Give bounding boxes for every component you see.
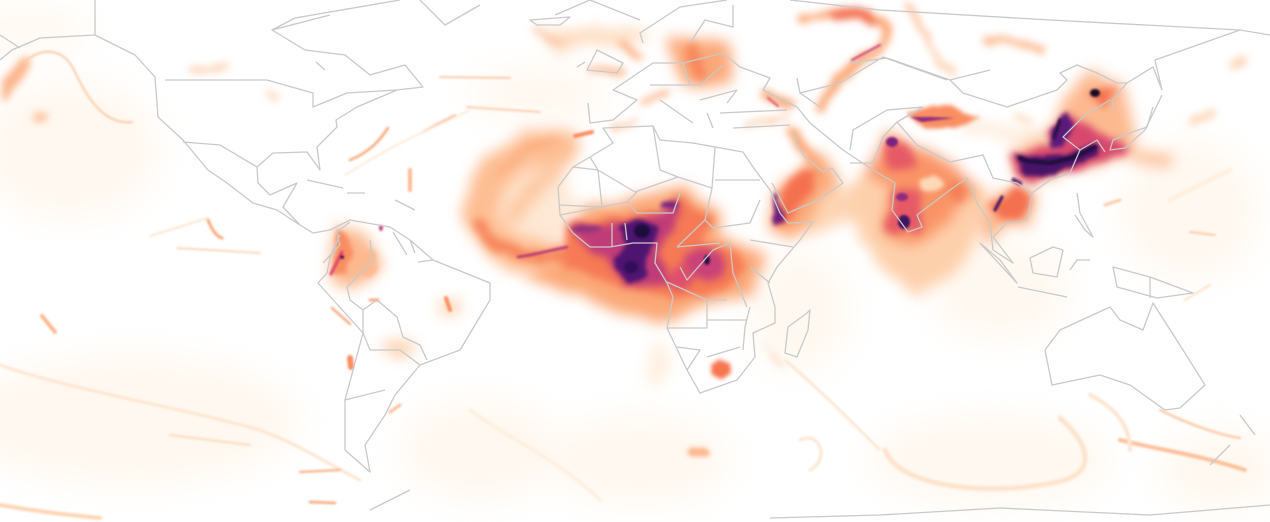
Europe outline [530, 0, 810, 128]
plume: west Africa and Atlantic swirl [477, 140, 760, 322]
Arctic islands [0, 0, 640, 70]
plume: east Africa and Arabia [768, 150, 880, 238]
New Zealand [1210, 415, 1255, 465]
plume: central Asia streak [905, 104, 980, 128]
plume: southern Africa [643, 333, 880, 457]
Southeast Asia islands [980, 193, 1193, 298]
plume: north Pacific and Atlantic streaks [0, 52, 1240, 300]
plume: South America [42, 218, 457, 412]
Antarctica fragments [370, 490, 1270, 518]
Madagascar [785, 310, 810, 357]
Eurasia outline [790, 0, 1270, 263]
plume: east Asia band [950, 65, 1168, 180]
Australia [1045, 303, 1205, 410]
plume: India [845, 132, 990, 295]
Cuba and Caribbean [307, 180, 415, 210]
plume: southern ocean swirls [0, 365, 1245, 518]
Africa outline [558, 126, 813, 393]
Arabia [772, 123, 843, 213]
plume: Europe and Russia streaks [530, 3, 1040, 158]
North America outline [0, 0, 423, 233]
South America outline [318, 220, 490, 472]
Japan [1110, 95, 1162, 150]
plume: Indochina [975, 180, 1035, 245]
Africa borders [560, 126, 793, 370]
